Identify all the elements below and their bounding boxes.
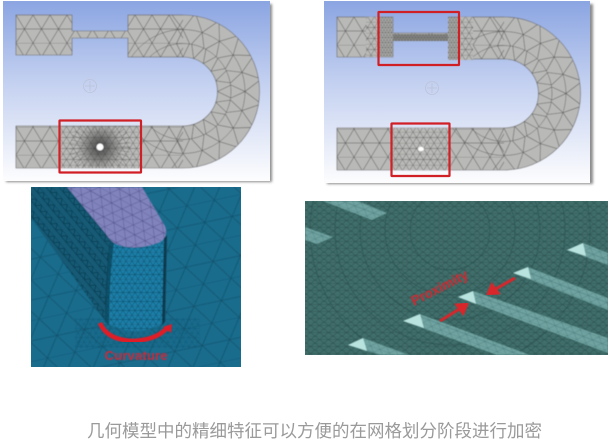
caption: 几何模型中的精细特征可以方便的在网格划分阶段进行加密 xyxy=(87,421,542,441)
curvature arrow xyxy=(100,323,172,341)
label: Curvature: Curvature xyxy=(104,348,168,363)
highlight box: narrow bar xyxy=(378,12,459,65)
raised ridges xyxy=(305,201,608,355)
U-shaped refined mesh model xyxy=(337,17,580,170)
panel: refined mesh with narrow bar xyxy=(324,1,593,184)
refined area near small hole xyxy=(392,128,450,170)
arrow: lower proximity arrow xyxy=(440,304,467,321)
arrow: upper proximity arrow xyxy=(488,278,515,294)
label: Proximity: Proximity xyxy=(409,267,471,309)
panel: curvature refinement xyxy=(31,187,241,367)
icon: origin marker xyxy=(426,82,438,94)
highlight box: small hole xyxy=(392,124,450,176)
highlight box around hole xyxy=(60,120,141,172)
3D mesh model xyxy=(31,187,241,367)
U-shaped mesh model xyxy=(16,15,260,171)
dense surface mesh xyxy=(305,201,608,355)
panel: proximity refinement xyxy=(305,201,608,355)
icon: origin marker xyxy=(84,80,96,92)
refined area near narrow bar xyxy=(366,17,473,60)
panel: coarse mesh with refined hole xyxy=(3,1,272,182)
